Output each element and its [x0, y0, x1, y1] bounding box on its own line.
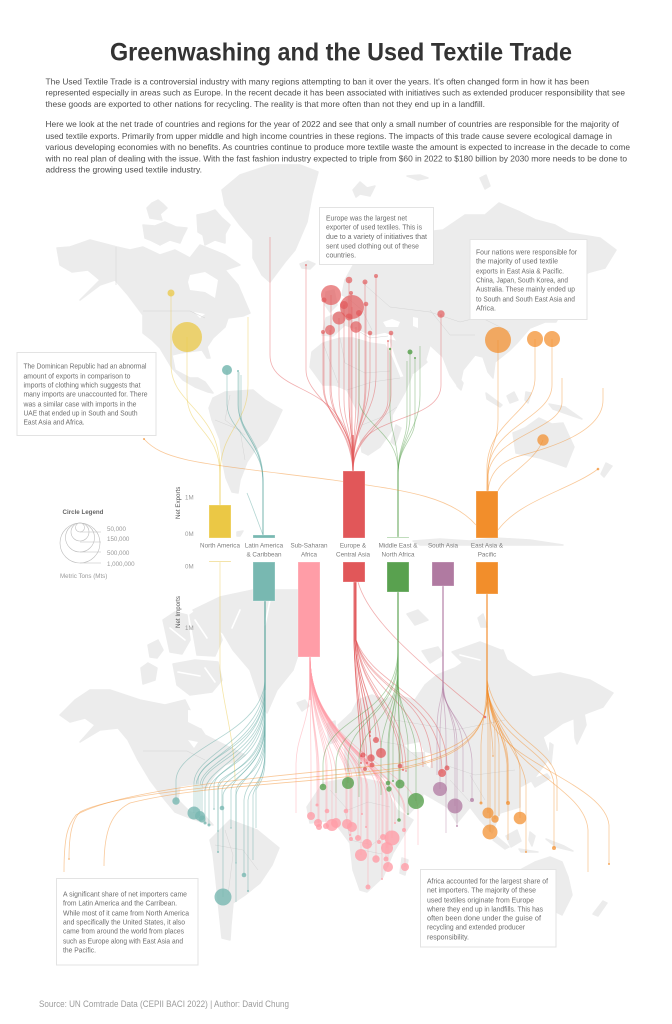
callout: East Asia: Australia. These mainly ended up: [476, 286, 575, 294]
callout: Dominican Republic: [17, 352, 156, 436]
import flows: Latin America & Caribbean: [176, 601, 265, 902]
export flows: Middle East & North Africa: [359, 339, 420, 537]
axis: net exports: 1M: [185, 494, 194, 502]
callout: Europe: due to a variety of initiatives that: [326, 234, 427, 241]
bubbles: Latin America exporters: [222, 365, 239, 375]
callout: Dominican Republic: amount of exports in comparison to: [24, 374, 131, 380]
bubbles: East Asia exporters: [143, 327, 599, 470]
region labels: North Africa: [382, 552, 415, 558]
bubbles: South Asia importers: [433, 782, 474, 827]
axis: net imports: 1M: [185, 625, 194, 632]
bubbles: North America exporters: [168, 290, 202, 352]
callout: East Asia: Four nations were responsible for: [476, 250, 578, 256]
circle legend: 150,000: [107, 536, 130, 543]
region labels: East Asia &: [471, 542, 504, 550]
export flows: East Asia & Pacific: [144, 339, 603, 530]
circle legend: 1,000,000: [107, 561, 135, 568]
callout: Dominican Republic: UAE that ended up in South and South: [24, 410, 138, 418]
import flows: North America: [220, 562, 235, 780]
circle legend: [60, 509, 135, 580]
callout: Europe: sent used clothing out of these: [326, 244, 419, 250]
import flows: East Asia & Pacific: [64, 594, 609, 872]
bubbles: Latin America importers: [172, 797, 249, 906]
callout: Africa: Africa accounted for the largest share of: [427, 878, 548, 886]
axis: net exports: Net Exports: [175, 487, 182, 519]
callout: East Asia: China, Japan, South Korea, and: [476, 278, 568, 284]
callout: Dominican Republic: was a similar case with imports in the: [23, 402, 137, 408]
bar chart: net exports: [209, 471, 498, 538]
export flows: Europe & Central Asia: [270, 237, 441, 471]
intro text: with no real plan of dealing with the issue. With the fast fashion industry expected to triple from $60 in 2022 to $180 billion by 2030 more needs to be done to: [44, 154, 627, 164]
callout: Latin America: A significant share of net importers came: [63, 892, 187, 898]
callout: Europe: [320, 208, 434, 264]
bubbles: Europe & Central Asia importers: [360, 716, 486, 777]
intro text: these goods are exported to other nations for recycling. The reality is that more often than not they end up in a landfill.: [46, 99, 485, 109]
axis: net imports: [175, 564, 194, 632]
bubbles: Europe & Central Asia exporters: [305, 264, 445, 342]
callout: Dominican Republic: many imports are unaccounted for. There: [24, 392, 148, 398]
region labels: [200, 542, 504, 558]
export flows: Latin America & Caribbean: [227, 370, 263, 535]
callout: Dominican Republic: The Dominican Republic had an abnormal: [24, 364, 147, 370]
intro text: Here we look at the net trade of countries and regions for the year of 2022 and see that only a small number of countries are responsible for the majority of: [46, 119, 620, 129]
bubbles: Sub-Saharan Africa importers: [307, 804, 409, 890]
axis: net imports: Net Imports: [175, 596, 182, 628]
callout: Africa: responsibility.: [427, 934, 469, 942]
source line: Source: UN Comtrade Data (CEPII BACI 2022) | Author: David Chung: [39, 999, 289, 1009]
callout: Latin America: the Pacific.: [63, 948, 96, 954]
callout: East Asia: Africa.: [476, 306, 496, 312]
axis: net exports: 0M: [185, 531, 194, 538]
region labels: Central Asia: [336, 552, 370, 558]
circle legend: Circle Legend: [63, 509, 104, 516]
callout: East Asia: exports in East Asia & Pacific.: [476, 268, 564, 276]
region labels: North America: [200, 542, 240, 550]
callout: Latin America: [56, 878, 198, 965]
callout: Africa: [420, 870, 556, 947]
callout: Latin America: came from around the world from places: [63, 928, 184, 936]
world map: imports: [60, 590, 613, 940]
export flows: North America: [171, 293, 248, 505]
intro text: address the growing used textile industry.: [46, 164, 202, 174]
bubbles: Middle East importers: [320, 777, 424, 822]
callout: Africa: often been done under the guise of: [427, 916, 541, 922]
import flows: Middle East & North Africa: [323, 592, 416, 820]
callout: Africa: used textiles originate from Europe: [427, 898, 534, 904]
callout: Latin America: and specifically the United States, it also: [63, 920, 185, 926]
callout: East Asia: the majority of used textile: [476, 258, 558, 266]
callout: Dominican Republic: East Asia and Africa.: [24, 420, 85, 426]
bubbles: East Asia importers: [68, 755, 610, 865]
callout: Latin America: such as Europe along with East Asia and: [63, 938, 183, 946]
axis: net imports: 0M: [185, 564, 194, 570]
circle legend: 500,000: [107, 550, 130, 557]
intro text: The Used Textile Trade is a controversial industry with many regions attempting to ban it over the years. It's often changed form in how it has been: [46, 76, 589, 86]
callout: Europe: exporter of used textiles. This is: [326, 224, 422, 232]
callout: East Asia: [470, 240, 587, 320]
region labels: Europe &: [340, 542, 367, 550]
callout: Africa: where they end up in landfills. This has: [426, 906, 543, 914]
circle legend: Metric Tons (Mts): [60, 573, 107, 580]
region labels: Middle East &: [379, 542, 418, 550]
region labels: & Caribbean: [246, 552, 282, 558]
region labels: Africa: [301, 552, 318, 558]
bubbles: Middle East exporters: [389, 348, 416, 359]
callout: Latin America: from Latin America and the Carribean.: [63, 900, 177, 908]
axis: net exports: [175, 487, 194, 538]
callout: Africa: recycling and extended producer: [427, 924, 526, 932]
import flows: Europe & Central Asia: [354, 582, 485, 773]
callout: Africa: net importers. The majority of these: [427, 888, 536, 894]
title: Greenwashing and the Used Textile Trade: [110, 38, 572, 66]
intro text: used textile exports. Primarily from upper middle and high income countries in these regions. The impacts of this trade cause severe ecological damage in: [46, 131, 612, 141]
world map: exports: [57, 165, 616, 545]
import flows: South Asia: [437, 586, 472, 833]
callout: East Asia: to South and South East Asia and: [476, 296, 575, 304]
region labels: Pacific: [478, 552, 496, 558]
callout: Europe: Europe was the largest net: [326, 216, 407, 222]
intro text: various developing economies with no benefits. As countries continue to produce more textile waste the amount is expected to increase in the decade to come: [46, 142, 630, 152]
callout: Europe: countries.: [326, 252, 356, 260]
callout: Dominican Republic: imports of clothing which suggests that: [24, 382, 141, 390]
region labels: South Asia: [428, 542, 459, 550]
intro text: represented especially in areas such as Europe. In the recent decade it has been associated with initiatives such as extended producer responsibility that see: [46, 88, 625, 98]
circle legend: 50,000: [107, 526, 126, 533]
region labels: Sub-Saharan: [290, 542, 328, 550]
import flows: Sub-Saharan Africa: [296, 657, 418, 887]
callout: Latin America: While most of it came from North America: [63, 910, 189, 918]
region labels: Latin America: [245, 542, 284, 550]
intro text: [44, 76, 630, 174]
bar chart: net imports: [209, 561, 498, 657]
